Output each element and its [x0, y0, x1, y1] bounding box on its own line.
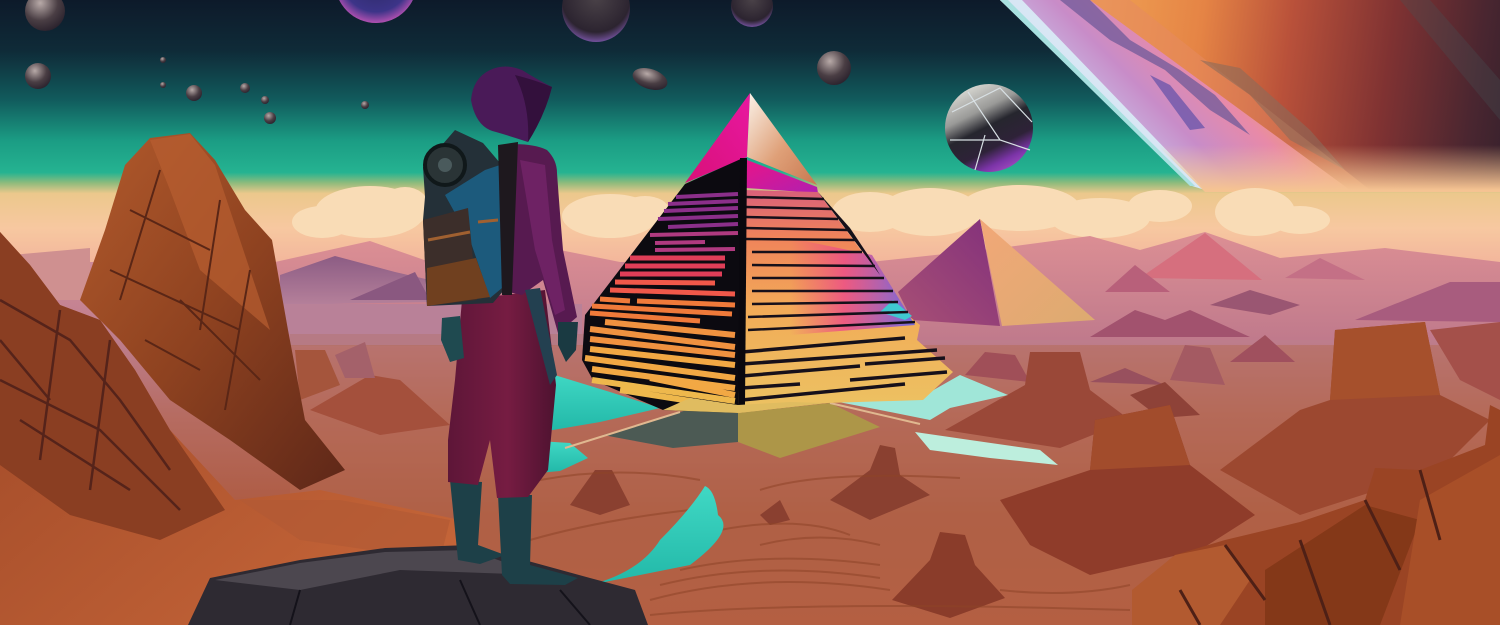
main iridescent pyramid [582, 93, 953, 413]
trousers [448, 290, 556, 498]
backpack [423, 130, 518, 306]
distant mountains [0, 232, 1500, 625]
rippled sand lines [530, 472, 1130, 615]
pyramid right face [738, 190, 953, 413]
rock ledge under the explorer [188, 545, 648, 625]
pyramid centre ridge [738, 158, 747, 413]
giant planet [1000, 0, 1500, 192]
boots [450, 480, 578, 585]
right foreground boulders [1132, 405, 1500, 625]
clouds on the horizon [292, 185, 1330, 238]
far pyramid [898, 219, 1095, 326]
floating spheres and rocks [25, 0, 1033, 172]
left foreground cliff and slope [0, 232, 460, 625]
pyramid capstone [685, 93, 818, 193]
explorer figure [423, 66, 578, 585]
hood fold shadow [515, 75, 552, 142]
shadow under the main pyramid [565, 403, 920, 458]
holster strap [525, 288, 557, 385]
hood [471, 66, 552, 142]
mid-ground mesas [290, 322, 1500, 625]
sky background [0, 0, 1500, 300]
left glove and right glove [441, 316, 578, 362]
water pools [538, 373, 1058, 585]
jacket sleeve highlight [520, 160, 565, 315]
tall rock spire on the left [80, 133, 345, 490]
jacket [500, 144, 577, 333]
pyramid left face [582, 158, 743, 413]
